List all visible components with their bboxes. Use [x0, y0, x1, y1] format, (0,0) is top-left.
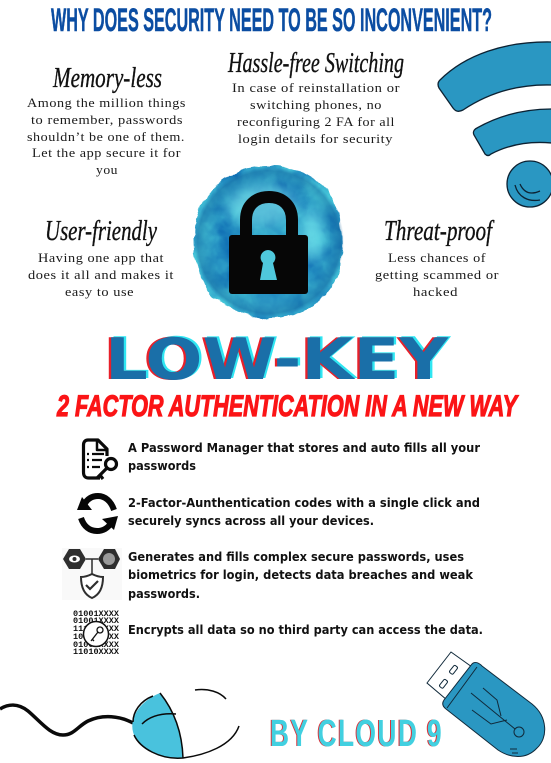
icon: encrypted binary key — [73, 609, 120, 657]
text: generates passwords — [128, 550, 473, 602]
icon: encrypted binary key: 11010XXXX — [73, 647, 120, 657]
text: generates passwords: biometrics for login, detects data breaches and weak — [128, 568, 473, 583]
feature: Memory-less — [27, 62, 186, 177]
label: by Cloud 9: BY CLOUD 9 — [270, 713, 443, 755]
feature: Threat-proof — [375, 215, 499, 299]
feature: Threat-proof: hacked — [413, 284, 458, 299]
feature: Memory-less: shouldn’t be one of them. — [27, 129, 185, 144]
feature: Memory-less: Let the app secure it for — [32, 145, 181, 160]
feature: Threat-proof: getting scammed or — [375, 267, 499, 282]
text: password manager: A Password Manager that stores and auto fills all your — [128, 441, 481, 456]
icon: encrypted binary key: 11101XXXX — [73, 624, 120, 634]
feature: Hassle-free Switching — [227, 47, 404, 146]
icon: padlock on watercolor blob — [194, 166, 344, 318]
icon: encrypted binary key: 01001XXXX — [73, 616, 120, 626]
feature: Hassle-free Switching: reconfiguring 2 FA for all — [237, 114, 395, 129]
feature: User-friendly: Having one app that — [38, 250, 164, 265]
icon: computer mouse — [0, 689, 239, 758]
text: 2FA codes: 2-Factor-Aunthentication codes with a single click and — [128, 496, 480, 511]
icon: encrypted binary key: 01001XXXX — [73, 640, 120, 650]
feature: Memory-less: Among the million things — [27, 95, 186, 110]
icon: sync arrows — [77, 496, 118, 531]
text: password manager — [128, 441, 481, 474]
text: encrypts data: Encrypts all data so no third party can access the data. — [128, 623, 483, 638]
feature: Memory-less: you — [96, 162, 118, 177]
heading: LOW-KEY: LOW-KEY — [105, 327, 449, 393]
icon: USB drive — [427, 652, 545, 756]
feature: Threat-proof: Threat-proof — [384, 215, 495, 247]
feature: User-friendly: easy to use — [65, 284, 134, 299]
feature: User-friendly: does it all and makes it — [28, 267, 174, 282]
feature: Memory-less: Memory-less — [52, 62, 162, 94]
feature: Hassle-free Switching: login details for security — [238, 131, 393, 146]
feature: User-friendly: User-friendly — [45, 215, 157, 247]
icon: biometrics shield — [62, 548, 122, 600]
feature: Hassle-free Switching: switching phones, no — [250, 97, 382, 112]
icon: document with key — [84, 440, 116, 479]
icon: encrypted binary key: 10101XXXX — [73, 632, 120, 642]
feature: Hassle-free Switching: In case of reinstallation or — [232, 80, 400, 95]
feature: Memory-less: to remember, passwords — [31, 112, 183, 127]
text: password manager: passwords — [128, 459, 196, 474]
text: generates passwords: Generates and fills complex secure passwords, uses — [128, 550, 464, 565]
text: generates passwords: passwords. — [128, 587, 200, 602]
icon: wifi signal — [438, 42, 551, 207]
feature: User-friendly — [28, 215, 174, 299]
feature: Hassle-free Switching: Hassle-free Switching — [227, 47, 404, 79]
text: 2FA codes — [128, 496, 480, 529]
icon: encrypted binary key: 01001XXXX — [73, 609, 120, 619]
feature: Threat-proof: Less chances of — [388, 250, 486, 265]
text: 2FA codes: securely syncs across all your devices. — [128, 514, 374, 529]
